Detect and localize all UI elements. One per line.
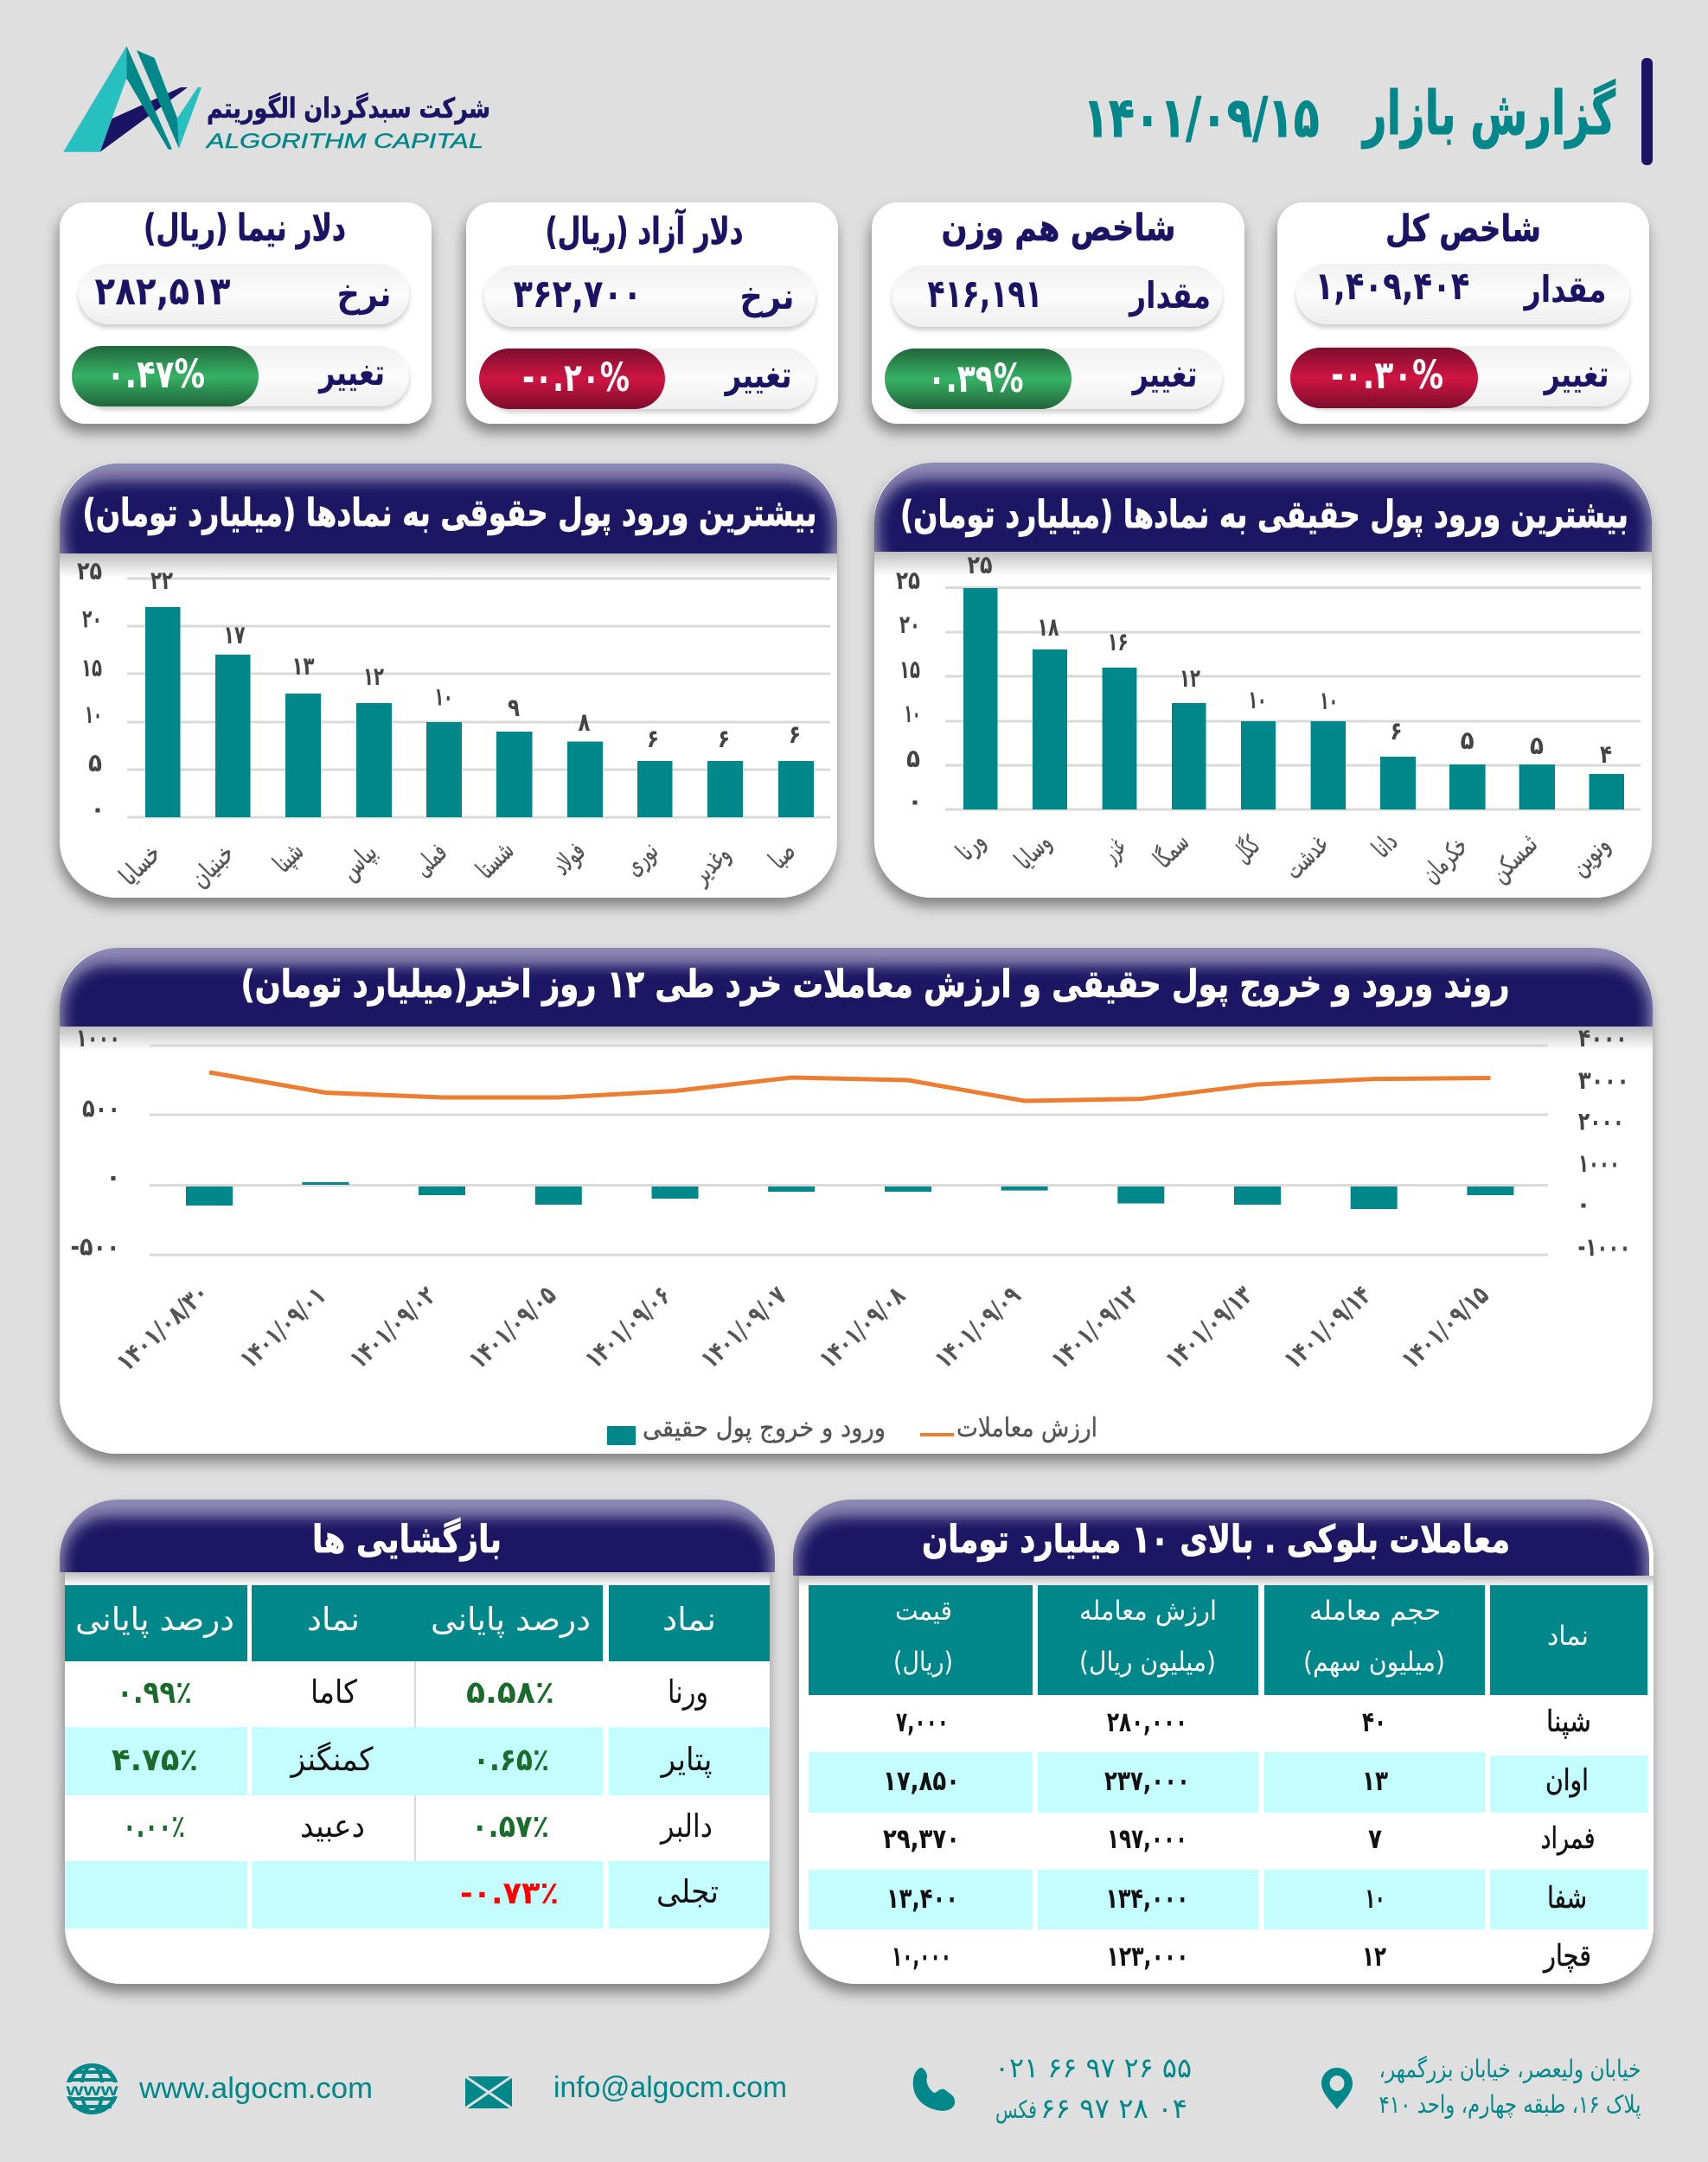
card: overall index — [1277, 202, 1649, 424]
date labels: ۱۴۰۱/۰۹/۱۴ — [1278, 1280, 1378, 1375]
row: Shapna: شپنا — [1546, 1705, 1591, 1739]
change row: -۰.۲۰% — [522, 355, 630, 400]
row: Dalbar and Daabid — [123, 1807, 713, 1845]
panel header — [874, 463, 1652, 552]
panel header — [60, 464, 837, 553]
row: Famrad: ۱۹۷,۰۰۰ — [1107, 1822, 1187, 1855]
table header row: (میلیون ریال) — [1079, 1647, 1216, 1678]
data labels: ۱۰ — [434, 681, 453, 711]
rate row: ۲۸۲,۵۱۳ — [95, 268, 230, 314]
title accent bar — [1641, 58, 1653, 165]
table: reopened symbols — [65, 1585, 770, 1929]
row: Petayer and Kemangenz: ۴.۷۵٪ — [112, 1743, 198, 1778]
value axis: ۲۵ — [77, 556, 102, 585]
row: Famrad — [883, 1821, 1595, 1856]
row: Petayer and Kemangenz — [112, 1741, 713, 1778]
right axis: ۱۰۰۰ — [1578, 1148, 1620, 1178]
value axis — [896, 566, 923, 816]
value axis — [77, 556, 106, 823]
symbol labels: شپنا — [267, 836, 310, 879]
table header row: قیمت — [895, 1596, 952, 1627]
value row: ۴۱۶,۱۹۱ — [927, 271, 1043, 317]
right axis: ۳۰۰۰ — [1578, 1065, 1629, 1095]
value axis: ۰ — [907, 786, 923, 816]
data labels: ۴ — [1600, 739, 1612, 769]
table header row: نماد — [307, 1601, 360, 1638]
panel header — [60, 948, 1653, 1027]
symbol labels: خکرمان — [1416, 831, 1474, 889]
change row: -۰.۳۰% — [1331, 352, 1443, 398]
phone numbers: فکس — [995, 2095, 1037, 2124]
row: Shapna: ۲۸۰,۰۰۰ — [1107, 1705, 1187, 1738]
date labels — [111, 1278, 1495, 1378]
symbol labels: صبا — [763, 836, 802, 875]
legend: ارزش معاملات — [956, 1413, 1097, 1443]
row: Shapna: ۴۰ — [1362, 1705, 1386, 1738]
table header row: (میلیون سهم) — [1303, 1647, 1445, 1678]
row: Avan: اوان — [1545, 1763, 1589, 1798]
symbol labels: وسایا — [1009, 828, 1058, 876]
footer: contact details — [64, 2051, 1641, 2125]
data labels: ۱۰ — [1249, 685, 1266, 714]
inflow/outflow bars — [186, 1182, 1513, 1209]
symbol labels: ونوین — [1564, 830, 1616, 882]
row: Famrad: ۲۹,۳۷۰ — [883, 1822, 960, 1855]
date labels: ۱۴۰۱/۰۹/۰۹ — [929, 1281, 1027, 1375]
table header row — [65, 1585, 770, 1661]
symbol labels: غزر — [1095, 832, 1132, 868]
date labels: ۱۴۰۱/۰۹/۱۲ — [1046, 1280, 1145, 1375]
right axis — [1576, 1023, 1631, 1262]
card title: شاخص کل — [1385, 208, 1541, 251]
row: Petayer and Kemangenz: ۰.۶۵٪ — [473, 1743, 549, 1778]
row: Dalbar and Daabid: دالبر — [659, 1807, 713, 1845]
right axis: ۴۰۰۰ — [1578, 1023, 1628, 1052]
card title: شاخص هم وزن — [941, 207, 1176, 250]
data labels: ۱۲ — [363, 662, 384, 691]
change row — [479, 349, 816, 409]
striped rows — [65, 1727, 770, 1929]
date labels: ۱۴۰۱/۰۹/۰۵ — [464, 1280, 562, 1375]
icon: phone — [913, 2068, 955, 2111]
card: Nima dollar — [60, 202, 432, 424]
date labels: ۱۴۰۱/۰۹/۰۲ — [344, 1281, 442, 1375]
panel: block trades table — [793, 1500, 1654, 1984]
symbol labels: دانا — [1366, 827, 1404, 864]
data labels: ۱۰ — [1320, 686, 1338, 715]
left axis — [71, 1023, 121, 1262]
change row: تغییر — [1131, 353, 1197, 396]
value row: مقدار — [1523, 268, 1607, 310]
panel: 12-day real money and retail value trend — [60, 948, 1653, 1454]
value axis: ۱۵ — [81, 653, 102, 682]
data labels: ۱۸ — [1038, 612, 1059, 642]
value axis: ۰ — [90, 794, 106, 823]
date labels: ۱۴۰۱/۰۹/۰۷ — [695, 1281, 793, 1375]
symbol labels: خبنیان — [184, 838, 240, 894]
row: Ghachar: ۱۲ — [1362, 1940, 1386, 1973]
card title: دلار نیما (ریال) — [144, 207, 346, 250]
table header row: (ریال) — [893, 1647, 953, 1678]
row: Verna and Kama: کاما — [310, 1673, 357, 1711]
rate row — [79, 264, 409, 324]
panel header: بازگشایی ها — [312, 1517, 502, 1562]
rate row: نرخ — [740, 275, 794, 318]
row: Shapna: ۷,۰۰۰ — [896, 1705, 949, 1738]
data labels: ۶ — [1391, 716, 1403, 745]
symbol labels: غدشت — [1278, 829, 1334, 886]
right axis: ۰ — [1576, 1189, 1591, 1219]
bars — [963, 588, 1624, 809]
data labels: ۹ — [508, 693, 520, 722]
left axis: ۰ — [106, 1162, 121, 1192]
card: equal-weight index — [872, 202, 1244, 424]
logo English name: ALGORITHM CAPITAL — [204, 130, 483, 153]
table header row: درصد پایانی — [431, 1601, 591, 1638]
data labels: ۱۲ — [1180, 663, 1200, 693]
table header row: ارزش معامله — [1079, 1596, 1217, 1627]
right axis: ۲۰۰۰ — [1578, 1107, 1624, 1136]
row: Ghachar: قچار — [1542, 1939, 1591, 1973]
icon: location pin — [1321, 2068, 1353, 2109]
bar chart: legal inflow — [77, 556, 830, 894]
icon: globe: www — [65, 2082, 118, 2100]
row: Petayer and Kemangenz: پتایر — [660, 1741, 713, 1778]
row: Tajalli — [460, 1873, 719, 1911]
row: Shafa — [886, 1881, 1587, 1916]
icon: envelope — [465, 2076, 512, 2108]
symbol labels — [113, 835, 802, 894]
value axis: ۱۰ — [85, 700, 102, 729]
trade value line — [209, 1072, 1490, 1101]
symbol labels: کگل — [1227, 830, 1266, 869]
row: Ghachar: ۱۰,۰۰۰ — [892, 1940, 951, 1973]
left axis: -۵۰۰ — [71, 1232, 119, 1262]
symbol labels: وغدیر — [685, 839, 737, 891]
data labels: ۵ — [1530, 731, 1544, 760]
rate row — [484, 265, 816, 327]
table header row — [809, 1585, 1647, 1695]
data labels: ۵ — [1461, 726, 1475, 755]
row: Shafa: ۱۰ — [1365, 1882, 1385, 1915]
row: Famrad: فمراد — [1541, 1821, 1595, 1856]
symbol labels: فملی — [407, 837, 453, 883]
value axis: ۱۵ — [899, 655, 920, 684]
row: Ghachar: ۱۲۳,۰۰۰ — [1107, 1940, 1188, 1973]
phone numbers: ۶۶ ۹۷ ۲۸ ۰۴ — [1040, 2092, 1187, 2125]
symbol labels: فولاد — [547, 836, 592, 881]
rate row: نرخ — [337, 272, 391, 316]
data labels: ۶ — [647, 724, 659, 753]
row: Verna and Kama: ۵.۵۸٪ — [466, 1675, 554, 1711]
title: market report with date — [1083, 58, 1653, 165]
change row: تغییر — [317, 351, 385, 394]
website: www.algocm.com — [138, 2072, 373, 2105]
data labels: ۲۵ — [967, 550, 993, 579]
left axis: ۵۰۰ — [82, 1093, 120, 1123]
change row: تغییر — [1543, 353, 1609, 396]
value axis: ۲۰ — [82, 604, 102, 633]
data labels: ۶ — [718, 724, 730, 753]
value row: ۱,۴۰۹,۴۰۴ — [1315, 263, 1470, 309]
change row — [885, 349, 1222, 409]
table header row: درصد پایانی — [75, 1601, 234, 1638]
row: Shapna — [896, 1705, 1591, 1739]
symbol labels: ورنا — [950, 826, 991, 867]
card title: دلار آزاد (ریال) — [545, 208, 744, 253]
change row: ۰.۳۹% — [927, 355, 1024, 401]
row: Verna and Kama: ورنا — [668, 1673, 708, 1711]
bar chart: real inflow — [896, 550, 1641, 889]
date labels: ۱۴۰۱/۰۹/۰۸ — [814, 1281, 912, 1375]
email: info@algocm.com — [553, 2071, 787, 2104]
value row — [892, 265, 1222, 327]
address: خیابان ولیعصر، خیابان بزرگمهر، — [1379, 2055, 1641, 2083]
row: Verna and Kama: ۰.۹۹٪ — [117, 1675, 192, 1711]
panel: top legal money inflow — [60, 464, 837, 898]
panel: top real money inflow — [874, 463, 1652, 898]
symbol labels: سمگا — [1148, 827, 1195, 874]
date labels: ۱۴۰۱/۰۹/۱۳ — [1160, 1280, 1259, 1375]
panel: reopened symbols table — [60, 1500, 775, 1984]
right axis: -۱۰۰۰ — [1577, 1232, 1631, 1262]
phone numbers: ۰۲۱ ۶۶ ۹۷ ۲۶ ۵۵ — [995, 2051, 1192, 2084]
row: Verna and Kama — [117, 1673, 708, 1711]
phone numbers — [995, 2051, 1192, 2125]
striped rows — [809, 1752, 1647, 1929]
data labels: ۶ — [789, 720, 801, 749]
row: Petayer and Kemangenz: کمنگنز — [290, 1741, 374, 1778]
data labels: ۸ — [578, 707, 591, 737]
legend — [607, 1413, 1097, 1445]
table header row: نماد — [1547, 1621, 1589, 1652]
row: Tajalli: -۰.۷۳٪ — [460, 1876, 559, 1911]
data labels — [967, 550, 1612, 769]
table header row: نماد — [662, 1601, 716, 1638]
symbol labels: شستا — [470, 835, 520, 885]
rate row: ۳۶۲,۷۰۰ — [514, 271, 642, 317]
date labels: ۱۴۰۱/۰۹/۱۵ — [1396, 1280, 1495, 1375]
symbol labels: ثمسکن — [1484, 829, 1544, 888]
symbol labels: خسایا — [113, 838, 167, 892]
legend: ورود و خروج پول حقیقی — [643, 1413, 886, 1443]
row: Dalbar and Daabid: ۰.۵۷٪ — [471, 1809, 549, 1845]
combo chart: bars and line — [71, 1023, 1631, 1445]
data labels: ۱۶ — [1108, 627, 1129, 656]
table header row: حجم معامله — [1309, 1596, 1441, 1627]
value axis: ۱۰ — [905, 699, 920, 728]
value axis: ۲۵ — [896, 566, 920, 595]
change row: ۰.۴۷% — [106, 351, 205, 397]
data labels: ۲۲ — [150, 566, 173, 595]
panel header: بیشترین ورود پول حقوقی به نمادها (میلیارد تومان) — [83, 491, 816, 535]
panel header: روند ورود و خروج پول حقیقی و ارزش معاملات خرد طی ۱۲ روز اخیر(میلیارد تومان) — [240, 963, 1510, 1007]
panel header: معاملات بلوکی . بالای ۱۰ میلیارد تومان — [922, 1518, 1510, 1562]
panel header — [793, 1500, 1649, 1576]
row: Ghachar — [892, 1939, 1591, 1973]
symbol labels — [950, 826, 1616, 889]
data labels — [150, 566, 801, 753]
data labels: ۱۳ — [292, 651, 315, 681]
row: Shafa: ۱۳,۴۰۰ — [886, 1882, 958, 1915]
logo: Algorithm Capital — [63, 46, 490, 153]
row: Avan: ۲۳۷,۰۰۰ — [1104, 1764, 1190, 1797]
logo mark — [63, 46, 202, 152]
row: Dalbar and Daabid: ۰.۰۰٪ — [123, 1809, 185, 1845]
value row — [1296, 263, 1629, 324]
row: Tajalli: تجلی — [656, 1873, 719, 1910]
left axis: ۱۰۰۰ — [76, 1023, 120, 1052]
change row — [72, 346, 409, 406]
row: Shafa: شفا — [1547, 1881, 1587, 1916]
table: block trades — [809, 1585, 1647, 1973]
symbol labels: نوری — [618, 836, 664, 882]
date labels: ۱۴۰۱/۰۹/۰۶ — [579, 1281, 677, 1375]
change row — [1290, 346, 1629, 408]
value axis: ۵ — [88, 748, 102, 777]
row: Shafa: ۱۳۴,۰۰۰ — [1105, 1882, 1188, 1915]
date labels: ۱۴۰۱/۰۹/۰۱ — [234, 1281, 332, 1375]
value axis: ۵ — [906, 744, 920, 773]
row: Avan — [883, 1763, 1589, 1798]
address — [1379, 2055, 1641, 2119]
value row: مقدار — [1128, 274, 1211, 317]
bars — [145, 607, 814, 817]
icon: globe — [64, 2065, 120, 2112]
row: Dalbar and Daabid: دعبید — [300, 1807, 365, 1845]
panel header — [60, 1500, 775, 1621]
logo Persian name: شرکت سبدگردان الگوریتم — [207, 92, 490, 125]
data labels: ۱۷ — [223, 620, 246, 649]
row: Avan: ۱۳ — [1362, 1764, 1388, 1797]
report date: ۱۴۰۱/۰۹/۱۵ — [1083, 86, 1320, 150]
row: Famrad: ۷ — [1368, 1822, 1382, 1855]
symbol labels: بپاس — [334, 837, 383, 886]
address: پلاک ۱۶، طبقه چهارم، واحد ۴۱۰ — [1379, 2090, 1641, 2119]
change row: تغییر — [724, 354, 792, 397]
card: free-market dollar — [466, 202, 838, 424]
row: Avan: ۱۷,۸۵۰ — [883, 1764, 960, 1797]
value axis: ۲۰ — [899, 610, 920, 639]
date labels: ۱۴۰۱/۰۸/۳۰ — [111, 1278, 215, 1378]
